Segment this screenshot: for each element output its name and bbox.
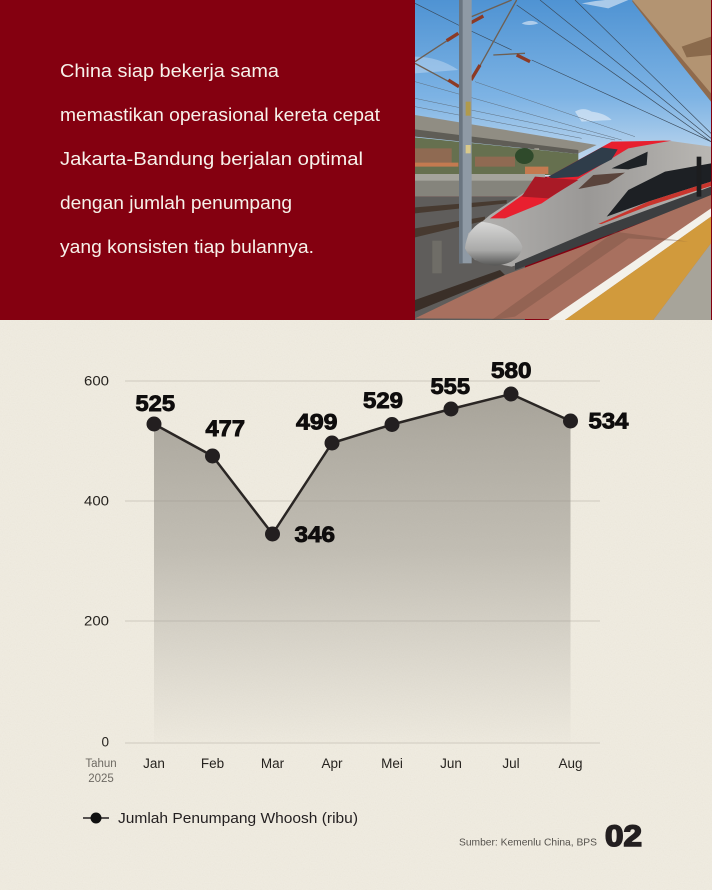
quote text: memastikan operasional kereta cepat: [60, 105, 380, 125]
line chart: [84, 358, 629, 785]
value labels: 346: [294, 522, 335, 547]
x axis labels: Aug: [558, 756, 583, 771]
x axis labels: Mar: [261, 756, 285, 771]
value labels: [136, 358, 629, 547]
source: Sumber: Kemenlu China, BPS: [459, 836, 597, 848]
value labels: 580: [491, 358, 532, 383]
data line: [154, 394, 570, 534]
quote text: Jakarta-Bandung berjalan optimal: [60, 149, 363, 169]
y axis labels: 200: [84, 614, 109, 628]
x axis labels: Jun: [440, 756, 462, 771]
y axis labels: 600: [84, 374, 109, 388]
station roof right: [632, 0, 711, 102]
pole: [459, 0, 472, 263]
data points: [146, 386, 578, 542]
axis year label: 2025: [88, 773, 114, 785]
track bed: [415, 197, 525, 320]
value labels: 529: [363, 388, 403, 413]
legend: Jumlah Penumpang Whoosh (ribu): [118, 810, 358, 827]
y axis labels: 400: [84, 494, 109, 508]
train: [465, 140, 711, 267]
quote text: dengan jumlah penumpang: [60, 193, 292, 213]
axis year label: Tahun: [85, 758, 117, 770]
panel: quote: [0, 0, 415, 320]
platform: [415, 195, 711, 320]
value labels: 499: [296, 410, 338, 434]
area fill: [154, 394, 570, 742]
x axis labels: Jul: [502, 756, 520, 771]
gridlines: [125, 381, 600, 743]
x axis labels: Feb: [201, 756, 224, 771]
value labels: 477: [206, 416, 245, 441]
x axis labels: Jan: [143, 756, 165, 771]
page number: 02: [605, 820, 642, 853]
platform wall: [415, 180, 532, 197]
value labels: 525: [136, 391, 175, 416]
town: [415, 137, 578, 175]
overhead wires: [415, 0, 711, 142]
overpass: [415, 115, 597, 153]
photo: Whoosh high-speed train at station: [415, 0, 712, 320]
value labels: 534: [588, 408, 629, 434]
x axis labels: Apr: [321, 756, 343, 771]
quote text: China siap bekerja sama: [60, 61, 280, 81]
axis year label: [85, 758, 117, 785]
value labels: 555: [430, 374, 470, 399]
quote text: [60, 61, 380, 257]
x axis labels: Mei: [381, 756, 403, 771]
y axis labels: [84, 374, 109, 750]
quote text: yang konsisten tiap bulannya.: [60, 237, 314, 257]
x axis labels: [143, 756, 583, 771]
y axis labels: 0: [101, 734, 109, 750]
